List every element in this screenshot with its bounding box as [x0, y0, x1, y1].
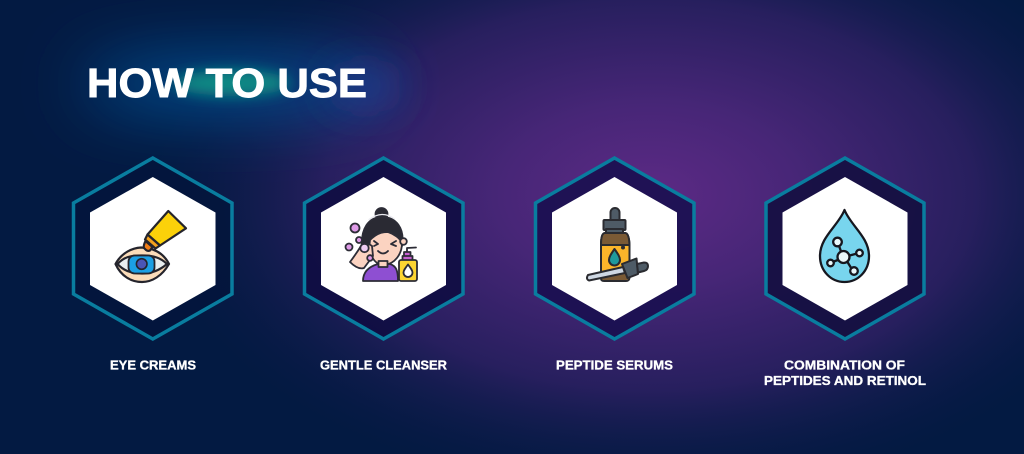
label: gentle cleanser: GENTLE CLEANSER	[320, 358, 447, 372]
hexagon frame 3	[536, 158, 694, 339]
icon: woman washing face with cleanser bottle	[346, 208, 417, 281]
title: HOW TO USE	[87, 60, 367, 106]
label: combination of peptides and retinol: PEPTIDES AND RETINOL	[764, 374, 926, 388]
icon: water drop with molecule	[820, 210, 869, 282]
hexagon frame 1	[74, 158, 232, 339]
label: combination of peptides and retinol	[764, 358, 926, 388]
step 4: combination	[764, 158, 926, 388]
label: peptide serums: PEPTIDE SERUMS	[556, 358, 673, 372]
step 1: eye creams	[74, 158, 232, 372]
icon: serum dropper bottle	[587, 208, 648, 281]
label: combination of peptides and retinol: COMBINATION OF	[784, 358, 905, 372]
step 2: gentle cleanser	[304, 158, 463, 372]
label: eye creams: EYE CREAMS	[110, 358, 196, 372]
hexagon frame 4	[766, 158, 924, 339]
hexagon frame 2	[304, 158, 463, 339]
step 3: peptide serums	[536, 158, 694, 372]
icon: eye and cream tube	[116, 211, 186, 282]
